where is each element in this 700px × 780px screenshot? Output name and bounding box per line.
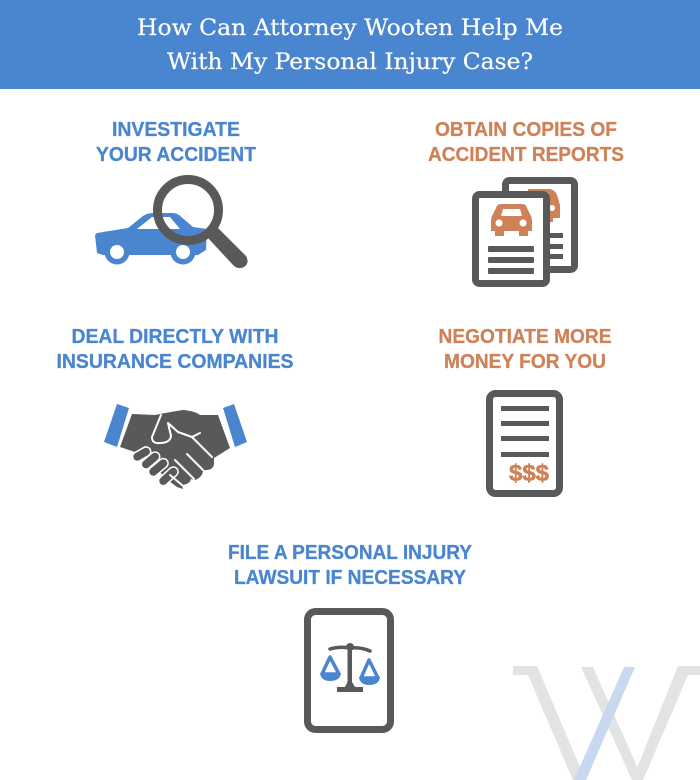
heading: negotiate more money for you: MONEY FOR YOU (444, 351, 606, 373)
title: How Can Attorney Wooten Help Me (137, 16, 563, 41)
heading: deal directly with insurance companies (56, 326, 294, 373)
icon: document with scales of justice (308, 612, 390, 730)
icon: accident report documents (476, 180, 574, 284)
icon: car under magnifying glass (95, 180, 248, 268)
heading: negotiate more money for you (438, 326, 612, 373)
heading: obtain copies of accident reports (428, 119, 624, 166)
heading: investigate your accident: INVESTIGATE (112, 119, 240, 141)
heading: investigate your accident (96, 119, 256, 166)
heading: obtain copies of accident reports: ACCIDENT REPORTS (428, 144, 624, 166)
title: With My Personal Injury Case? (167, 50, 533, 75)
heading: file a personal injury lawsuit: LAWSUIT IF NECESSARY (234, 567, 467, 589)
icon: handshake (104, 404, 247, 489)
heading: deal directly with insurance companies: DEAL DIRECTLY WITH (72, 326, 278, 348)
title (137, 16, 563, 75)
heading: file a personal injury lawsuit: FILE A PERSONAL INJURY (228, 542, 473, 564)
header banner (0, 0, 700, 89)
heading: file a personal injury lawsuit (228, 542, 473, 589)
dollar signs: $$$ (509, 460, 549, 486)
heading: investigate your accident: YOUR ACCIDENT (96, 144, 256, 166)
icon: settlement document (490, 394, 560, 494)
heading: obtain copies of accident reports: OBTAIN COPIES OF (435, 119, 617, 141)
watermark: W logo (513, 666, 700, 780)
heading: deal directly with insurance companies: INSURANCE COMPANIES (56, 351, 294, 373)
heading: negotiate more money for you: NEGOTIATE MORE (438, 326, 612, 348)
